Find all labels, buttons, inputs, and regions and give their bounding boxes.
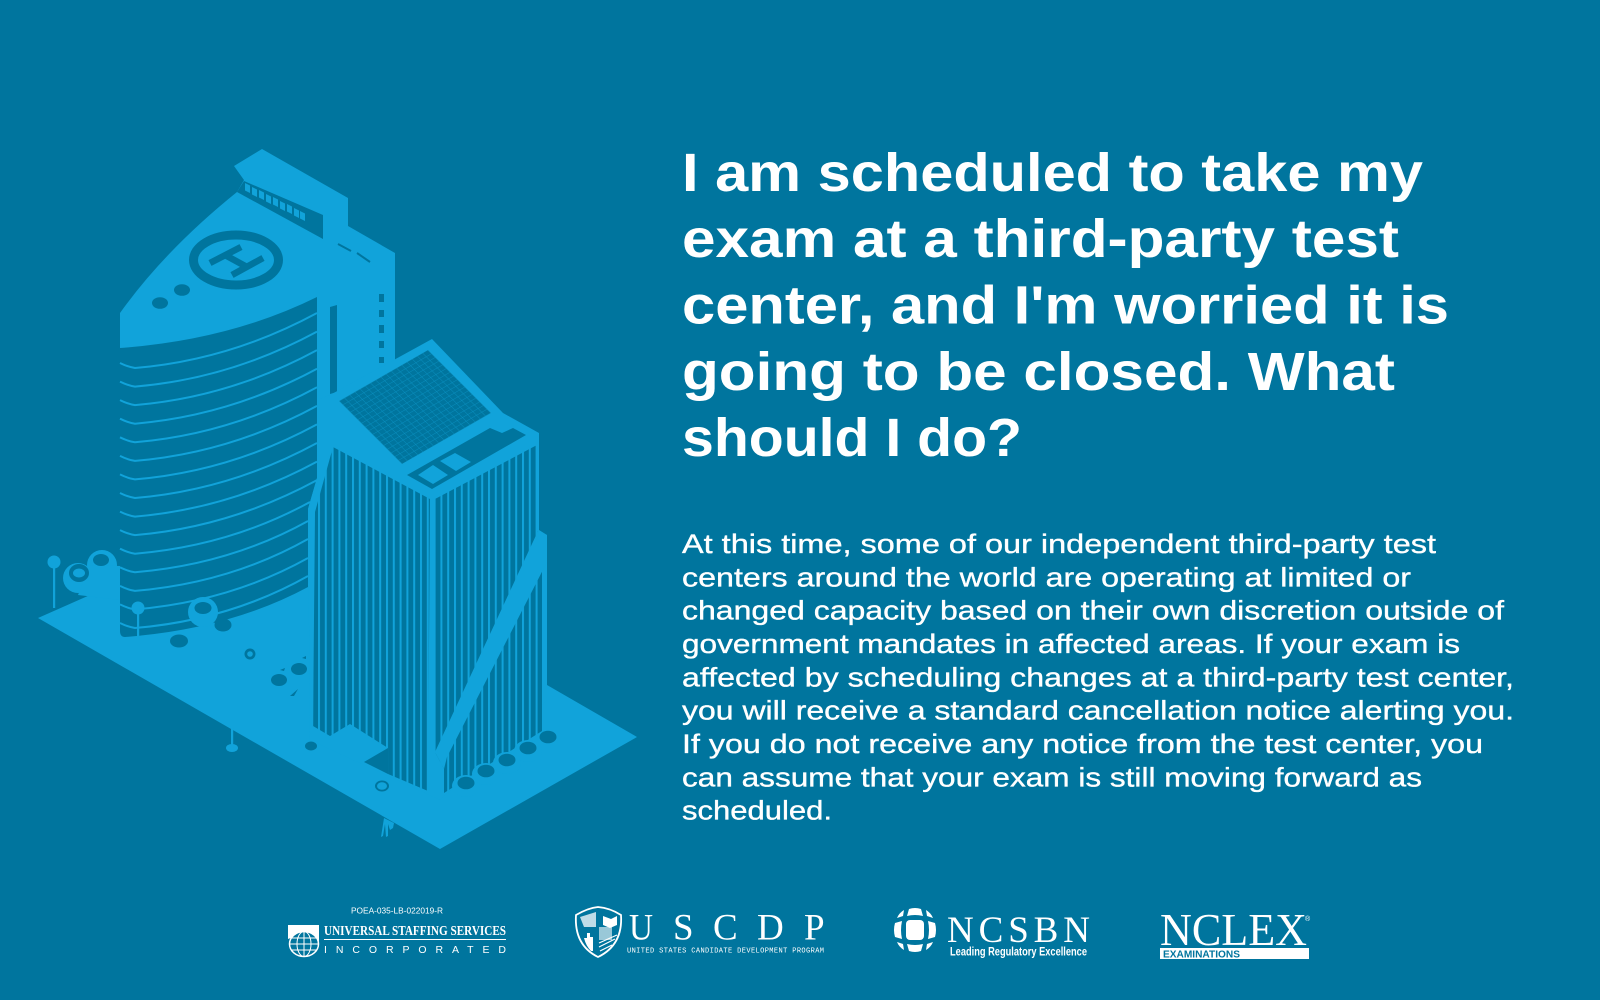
logo: USCDP: S bbox=[673, 908, 694, 948]
rooftop vent strip bbox=[237, 181, 323, 239]
logo: NCSBN bbox=[894, 908, 1090, 958]
logo: Universal Staffing Services bbox=[288, 906, 506, 956]
rear tower silhouette bbox=[120, 149, 395, 600]
heading: should I do? bbox=[682, 408, 1022, 468]
logo: USCDP: U bbox=[629, 908, 653, 948]
logo: USCDP: C bbox=[713, 908, 738, 948]
trees and ground details bbox=[48, 550, 556, 837]
body text: you will receive a standard cancellation notice alerting you. bbox=[682, 696, 1514, 726]
curved tower facade bands bbox=[120, 297, 317, 637]
body text bbox=[682, 529, 1514, 826]
body text: changed capacity based on their own discretion outside of bbox=[682, 596, 1505, 626]
body text: At this time, some of our independent third-party test bbox=[682, 529, 1437, 559]
body text: If you do not receive any notice from the test center, you bbox=[682, 729, 1483, 759]
heading: going to be closed. What bbox=[682, 342, 1395, 402]
front tower left facade bbox=[313, 447, 430, 791]
logo: Universal Staffing Services: POEA-035-LB-022019-R bbox=[351, 906, 443, 916]
helipad bbox=[194, 235, 278, 285]
diagonal brace bbox=[435, 531, 547, 769]
rear block details bbox=[330, 244, 384, 394]
heading: center, and I'm worried it is bbox=[682, 276, 1449, 336]
icon: globe flag bbox=[288, 925, 319, 956]
body text: can assume that your exam is still moving forward as bbox=[682, 762, 1422, 792]
entrance notch bbox=[364, 748, 388, 774]
icon: NCSBN globe bbox=[894, 908, 936, 952]
logo: NCLEX: ® bbox=[1305, 915, 1311, 923]
logo: USCDP: D bbox=[757, 908, 784, 948]
logo: USCDP: UNITED STATES CANDIDATE DEVELOPMENT PROGRAM bbox=[627, 948, 824, 956]
front tower roof bbox=[308, 339, 547, 800]
logo: NCSBN: Leading Regulatory Excellence bbox=[950, 946, 1087, 958]
body text: centers around the world are operating at limited or bbox=[682, 562, 1411, 592]
roof vents bbox=[152, 284, 190, 309]
heading: I am scheduled to take my bbox=[682, 143, 1423, 203]
logo: NCLEX: NCLEX bbox=[1160, 904, 1307, 955]
front tower right facade bbox=[435, 445, 542, 793]
ground plane bbox=[38, 560, 637, 849]
logo: USCDP: P bbox=[804, 908, 825, 948]
logo: NCLEX: EXAMINATIONS bbox=[1163, 948, 1240, 960]
roof equipment bbox=[407, 428, 526, 489]
logo: Universal Staffing Services: INCORPORATED bbox=[324, 944, 506, 956]
body text: government mandates in affected areas. If your exam is bbox=[682, 629, 1460, 659]
logo: Universal Staffing Services: UNIVERSAL STAFFING SERVICES bbox=[324, 924, 506, 939]
logo: NCSBN: NCSBN bbox=[947, 910, 1090, 951]
heading: exam at a third-party test bbox=[682, 209, 1399, 269]
body text: affected by scheduling changes at a third-party test center, bbox=[682, 662, 1514, 692]
icon: shield bbox=[576, 907, 621, 957]
heading bbox=[682, 143, 1449, 468]
body text: scheduled. bbox=[682, 796, 832, 826]
solar panel bbox=[339, 350, 491, 464]
illustration: isometric office buildings bbox=[38, 149, 637, 849]
logo: USCDP bbox=[576, 907, 825, 957]
